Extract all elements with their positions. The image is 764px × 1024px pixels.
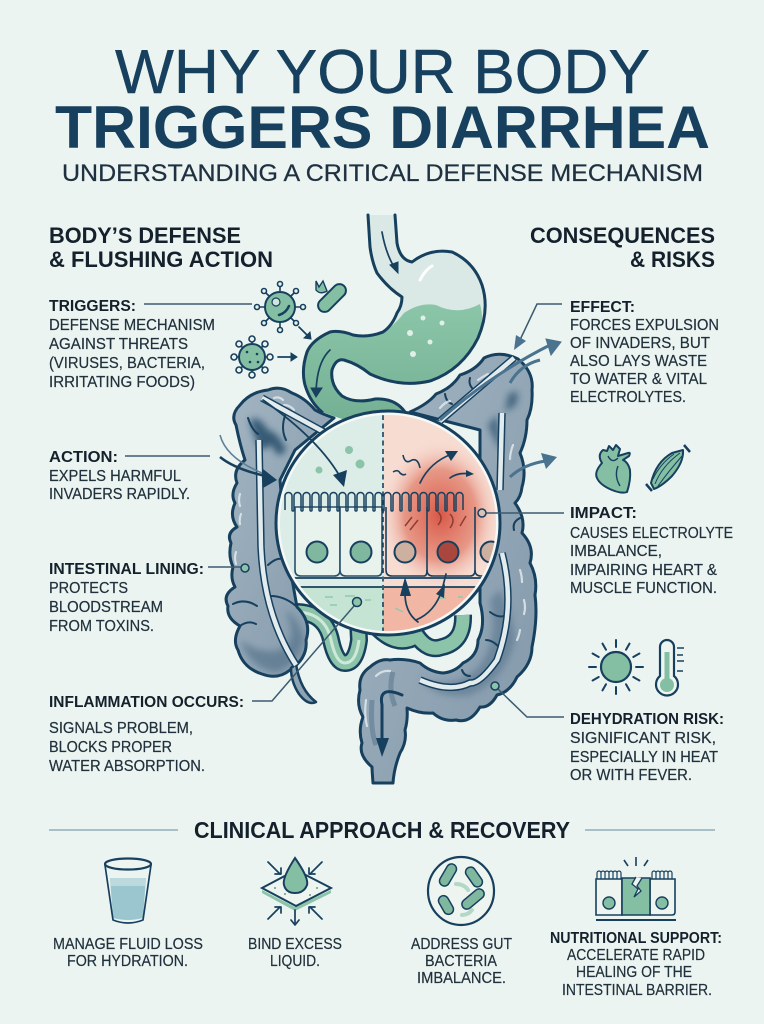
text: nutritional support <box>550 930 722 999</box>
label: inflammation: BLOCKS PROPER <box>49 739 172 756</box>
icon: virus 1 <box>254 282 306 332</box>
arrows: pathogens to stomach <box>278 327 311 361</box>
text: nutritional support: HEALING OF THE <box>576 964 692 981</box>
text: address gut bacteria: IMBALANCE. <box>417 970 506 987</box>
text: nutritional support: INTESTINAL BARRIER. <box>562 982 712 999</box>
arrow: esophagus flow <box>382 232 398 273</box>
arrow: expulsion up right <box>440 339 561 420</box>
text: address gut bacteria: ADDRESS GUT <box>411 936 512 953</box>
label: triggers <box>49 298 215 391</box>
label: effect: FORCES EXPULSION <box>570 317 719 334</box>
label: intestinal lining: INTESTINAL LINING: <box>49 561 204 578</box>
label: effect <box>570 299 719 406</box>
icon: virus 2 <box>231 336 273 378</box>
label: dehydration: ESPECIALLY IN HEAT <box>570 749 718 766</box>
icon: bind liquid <box>262 858 331 925</box>
text: nutritional support: ACCELERATE RAPID <box>567 947 705 964</box>
small intestine loops <box>295 612 463 663</box>
arrow: rectum downward <box>376 692 402 757</box>
colon: ascending and left transverse <box>226 388 334 703</box>
label: triggers: (VIRUSES, BACTERIA, <box>49 355 205 372</box>
heading: consequences: & RISKS <box>630 247 715 272</box>
label: inflammation: INFLAMMATION OCCURS: <box>49 694 244 711</box>
label: action: ACTION: <box>49 449 118 466</box>
heading: consequences <box>530 223 715 272</box>
label: intestinal lining: BLOODSTREAM <box>49 599 163 616</box>
label: impact: IMPAIRING HEART & <box>570 562 718 579</box>
label: inflammation: WATER ABSORPTION. <box>49 758 205 775</box>
text: address gut bacteria: BACTERIA <box>425 953 498 970</box>
label: dehydration: OR WITH FEVER. <box>570 767 692 784</box>
icon: gut bacteria <box>428 857 494 925</box>
label: impact <box>570 505 733 597</box>
label: triggers: TRIGGERS: <box>49 298 136 315</box>
label: dehydration <box>570 711 724 784</box>
label: triggers: DEFENSE MECHANISM <box>49 317 215 334</box>
section heading: clinical approach: CLINICAL APPROACH & RECOVERY <box>194 817 570 843</box>
label: effect: ALSO LAYS WASTE <box>570 353 707 370</box>
heading: consequences: CONSEQUENCES <box>530 223 715 248</box>
arrow: into circle <box>263 400 347 487</box>
label: effect: OF INVADERS, BUT <box>570 335 711 352</box>
label: inflammation <box>49 694 244 775</box>
text: manage fluid loss <box>53 936 203 970</box>
title: TRIGGERS DIARRHEA <box>55 94 710 161</box>
icon: muscle <box>646 445 690 491</box>
label: impact: CAUSES ELECTROLYTE <box>570 525 733 542</box>
text: bind excess liquid: LIQUID. <box>270 953 320 970</box>
icon: bacterium <box>315 281 349 315</box>
leader: impact <box>478 509 564 517</box>
title: WHY YOUR BODY <box>115 38 650 107</box>
heading: body's defense: BODY’S DEFENSE <box>49 223 241 248</box>
label: impact: IMBALANCE, <box>570 543 662 560</box>
digestive illustration <box>226 215 536 783</box>
label: dehydration: SIGNIFICANT RISK, <box>570 730 716 747</box>
leader: effect <box>514 304 562 350</box>
label: dehydration: DEHYDRATION RISK: <box>570 711 724 728</box>
leader: intestinal lining <box>208 564 249 572</box>
label: action: EXPELS HARMFUL <box>49 468 181 485</box>
leader: inflammation <box>252 598 362 701</box>
text: nutritional support: NUTRITIONAL SUPPORT: <box>550 930 722 947</box>
title <box>55 38 710 161</box>
label: inflammation: SIGNALS PROBLEM, <box>49 720 193 737</box>
label: effect: TO WATER & VITAL <box>570 371 707 388</box>
label: intestinal lining <box>49 561 204 635</box>
label: action <box>49 449 190 503</box>
leader: action <box>125 455 210 457</box>
icon: heart <box>596 445 630 493</box>
icon: intestinal barrier healing <box>596 857 676 920</box>
colon channels <box>259 358 514 687</box>
magnified intestinal lining circle <box>270 410 508 640</box>
label: intestinal lining: PROTECTS <box>49 580 128 597</box>
text: address gut bacteria <box>411 936 512 987</box>
arrow: stomach to intestine <box>311 350 330 397</box>
arrows inside inflamed tissue <box>400 451 474 622</box>
icon: glass of water <box>105 858 151 923</box>
arrow: left inflow <box>220 435 277 488</box>
text: bind excess liquid <box>248 936 342 970</box>
arrow: electrolyte loss right <box>510 453 557 477</box>
label: action: INVADERS RAPIDLY. <box>49 486 190 503</box>
label: impact: IMPACT: <box>570 505 637 522</box>
text: manage fluid loss: FOR HYDRATION. <box>67 953 188 970</box>
text: bind excess liquid: BIND EXCESS <box>248 936 342 953</box>
icon: thermometer <box>656 640 684 695</box>
leader: triggers <box>144 303 252 305</box>
colon: right transverse and descending <box>359 354 536 783</box>
leader: dehydration <box>491 682 564 717</box>
label: impact: MUSCLE FUNCTION. <box>570 580 717 597</box>
text: manage fluid loss: MANAGE FLUID LOSS <box>53 936 203 953</box>
label: effect: EFFECT: <box>570 299 635 316</box>
heading: body's defense <box>49 223 273 272</box>
subtitle: UNDERSTANDING A CRITICAL DEFENSE MECHANISM <box>62 160 703 187</box>
heading: body's defense: & FLUSHING ACTION <box>49 247 273 272</box>
label: effect: ELECTROLYTES. <box>570 389 686 406</box>
label: triggers: IRRITATING FOODS) <box>49 374 195 391</box>
icon: sun <box>589 640 643 694</box>
esophagus and stomach <box>303 215 485 420</box>
label: intestinal lining: FROM TOXINS. <box>49 618 154 635</box>
label: triggers: AGAINST THREATS <box>49 336 188 353</box>
